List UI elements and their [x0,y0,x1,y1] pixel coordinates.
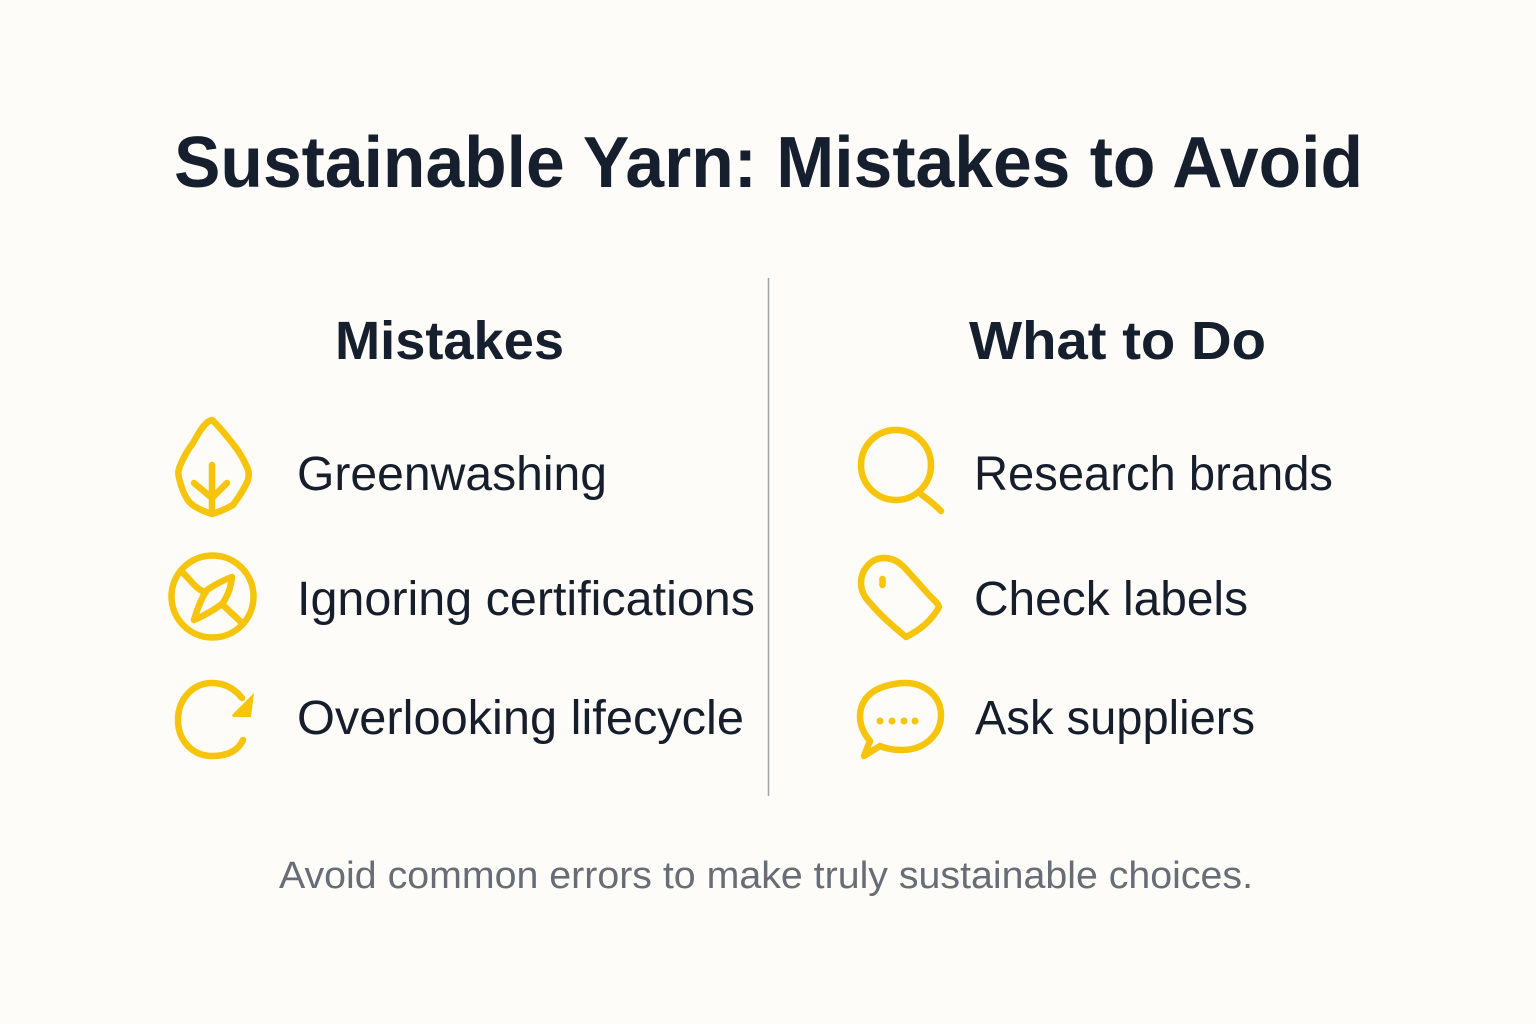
text: greenwashing: Greenwashing [297,448,607,501]
icon: refresh arrow [178,683,254,756]
text: research brands: Research brands [974,448,1333,501]
text: check labels: Check labels [974,573,1248,626]
icon: speech bubble [860,683,941,756]
panel: mistakes [172,311,755,756]
text: overlooking lifecycle: Overlooking lifecycle [297,692,744,745]
icon: magnifying glass [861,430,941,511]
title: Sustainable Yarn: Mistakes to Avoid [174,123,1363,203]
heading: mistakes: Mistakes [335,311,564,371]
icon: label tag [861,558,939,637]
text: ask suppliers: Ask suppliers [975,692,1255,745]
footer caption: Avoid common errors to make truly sustainable choices. [279,855,1253,897]
text: ignoring certifications: Ignoring certifications [297,573,755,626]
heading: what to do: What to Do [969,311,1266,371]
icon: crossed-out leaf [172,556,254,638]
icon: leaf with down arrow [178,420,249,514]
panel: what to do [860,311,1333,756]
